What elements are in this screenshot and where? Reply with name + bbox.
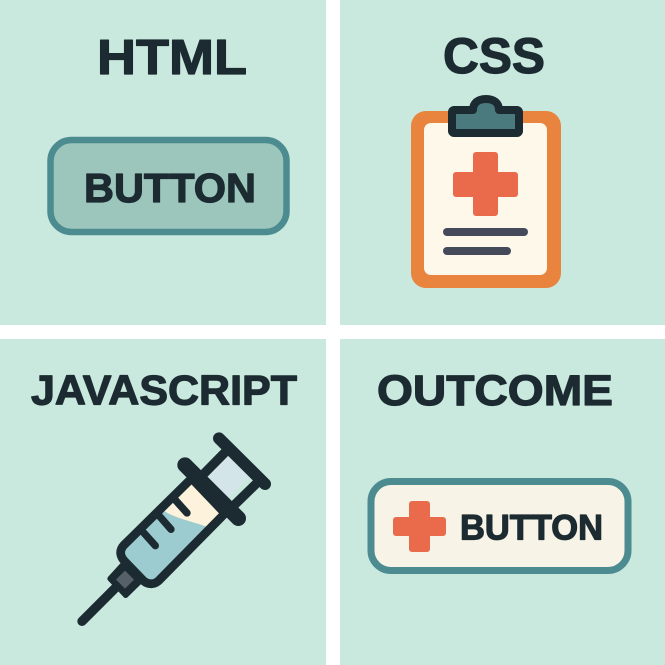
- panel: Outcome: [340, 339, 665, 665]
- button with cross: BUTTON: [460, 508, 603, 548]
- plunger: [202, 438, 265, 506]
- plain button: BUTTON: [84, 165, 256, 211]
- icon: clipboard: [411, 99, 561, 288]
- panel: JavaScript: [0, 339, 326, 665]
- medical cross: [393, 501, 446, 552]
- hub: [110, 564, 140, 595]
- heading: Outcome: OUTCOME: [377, 367, 613, 415]
- flange: [185, 465, 238, 518]
- button with cross: [371, 482, 628, 570]
- heading: HTML: HTML: [97, 31, 247, 85]
- plain button: [50, 140, 286, 232]
- graduation ticks: [144, 500, 187, 546]
- icon: syringe: [82, 438, 265, 621]
- panel: HTML: [0, 0, 326, 325]
- clipboard clip: [452, 99, 519, 133]
- barrel: [121, 478, 225, 584]
- panel: CSS: [340, 0, 665, 325]
- heading: CSS: CSS: [443, 28, 545, 84]
- medical cross: [453, 152, 518, 216]
- needle: [82, 588, 115, 621]
- heading: JavaScript: JAVASCRIPT: [31, 366, 297, 414]
- text lines: [443, 228, 528, 255]
